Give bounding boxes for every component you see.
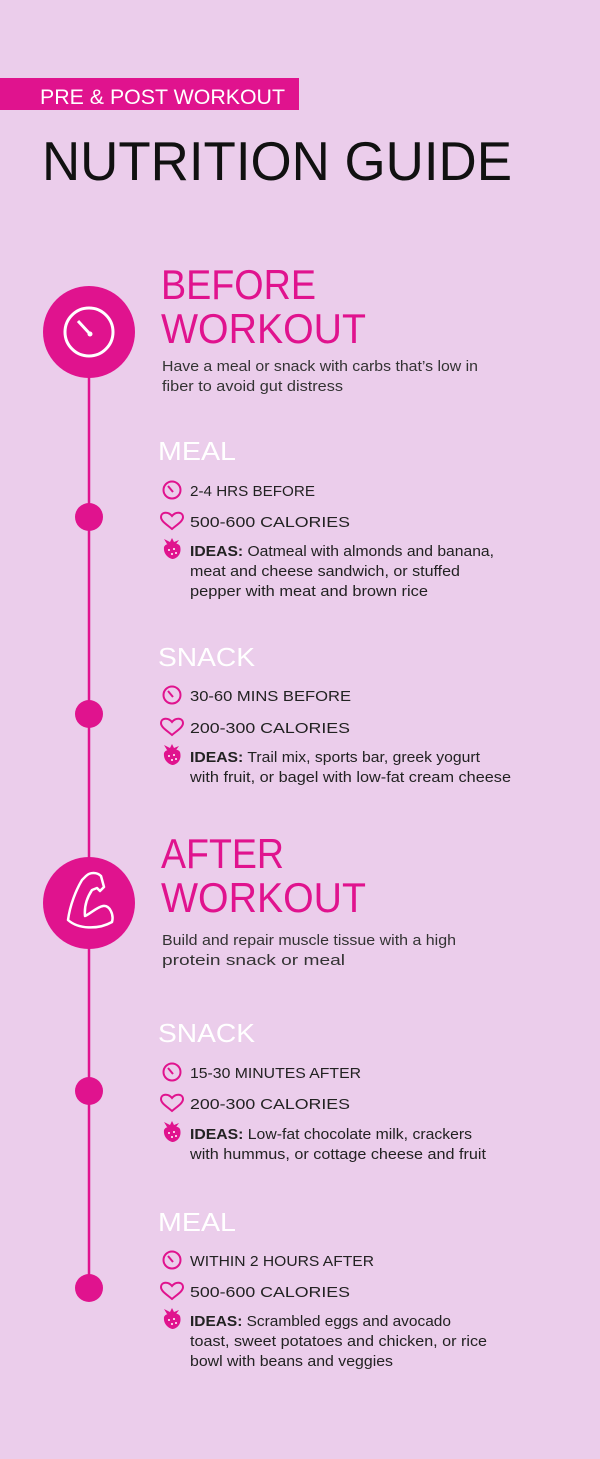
text: before description	[162, 358, 478, 395]
section: after meal: toast, sweet potatoes and chicken, or rice	[190, 1333, 487, 1350]
section: after meal: 500-600 CALORIES	[190, 1284, 350, 1301]
heading: after workout: WORKOUT	[161, 874, 366, 921]
icon: clock circle	[43, 286, 135, 378]
section: before meal: meat and cheese sandwich, or stuffed	[190, 563, 460, 580]
heading: before workout: WORKOUT	[161, 305, 366, 352]
section: after snack: IDEAS: Low-fat chocolate milk, crackers	[190, 1126, 472, 1143]
icon: flexed arm circle	[43, 857, 135, 949]
text: after description	[162, 932, 456, 969]
heading: before workout	[161, 261, 366, 352]
section: before snack: SNACK	[158, 642, 256, 672]
heading: after workout: AFTER	[161, 830, 284, 877]
section: after meal	[75, 1207, 487, 1370]
text: before description: Have a meal or snack with carbs that’s low in	[162, 358, 478, 375]
section: after snack: with hummus, or cottage cheese and fruit	[189, 1146, 487, 1163]
section: after snack: 15-30 MINUTES AFTER	[190, 1065, 361, 1082]
section: before snack: with fruit, or bagel with low-fat cream cheese	[189, 769, 511, 786]
section: after meal: bowl with beans and veggies	[190, 1353, 393, 1370]
section: before meal: 500-600 CALORIES	[190, 514, 350, 531]
section: before meal: MEAL	[158, 436, 236, 466]
section: before snack: IDEAS: Trail mix, sports bar, greek yogurt	[190, 749, 481, 766]
text: after description: protein snack or meal	[162, 952, 345, 969]
section: after snack: SNACK	[158, 1018, 256, 1048]
section: before meal	[75, 436, 494, 600]
section: after snack	[75, 1018, 487, 1163]
title: NUTRITION GUIDE	[42, 130, 512, 192]
heading: before workout: BEFORE	[161, 261, 316, 308]
section: before meal: 2-4 HRS BEFORE	[190, 483, 315, 500]
section: after snack: 200-300 CALORIES	[190, 1096, 350, 1113]
section: before meal: pepper with meat and brown rice	[190, 583, 428, 600]
section: after meal: MEAL	[158, 1207, 236, 1237]
banner: pre & post workout: PRE & POST WORKOUT	[40, 86, 285, 109]
section: after meal: WITHIN 2 HOURS AFTER	[190, 1253, 374, 1270]
banner: pre & post workout	[0, 78, 299, 110]
section: before snack: 200-300 CALORIES	[190, 720, 350, 737]
text: after description: Build and repair muscle tissue with a high	[162, 932, 456, 949]
text: before description: fiber to avoid gut distress	[162, 378, 343, 395]
section: before meal: IDEAS: Oatmeal with almonds and banana,	[190, 543, 494, 560]
section: after meal: IDEAS: Scrambled eggs and avocado	[190, 1313, 451, 1330]
timeline line	[88, 330, 90, 1288]
section: before snack	[75, 642, 511, 786]
heading: after workout	[161, 830, 366, 921]
section: before snack: 30-60 MINS BEFORE	[190, 688, 351, 705]
